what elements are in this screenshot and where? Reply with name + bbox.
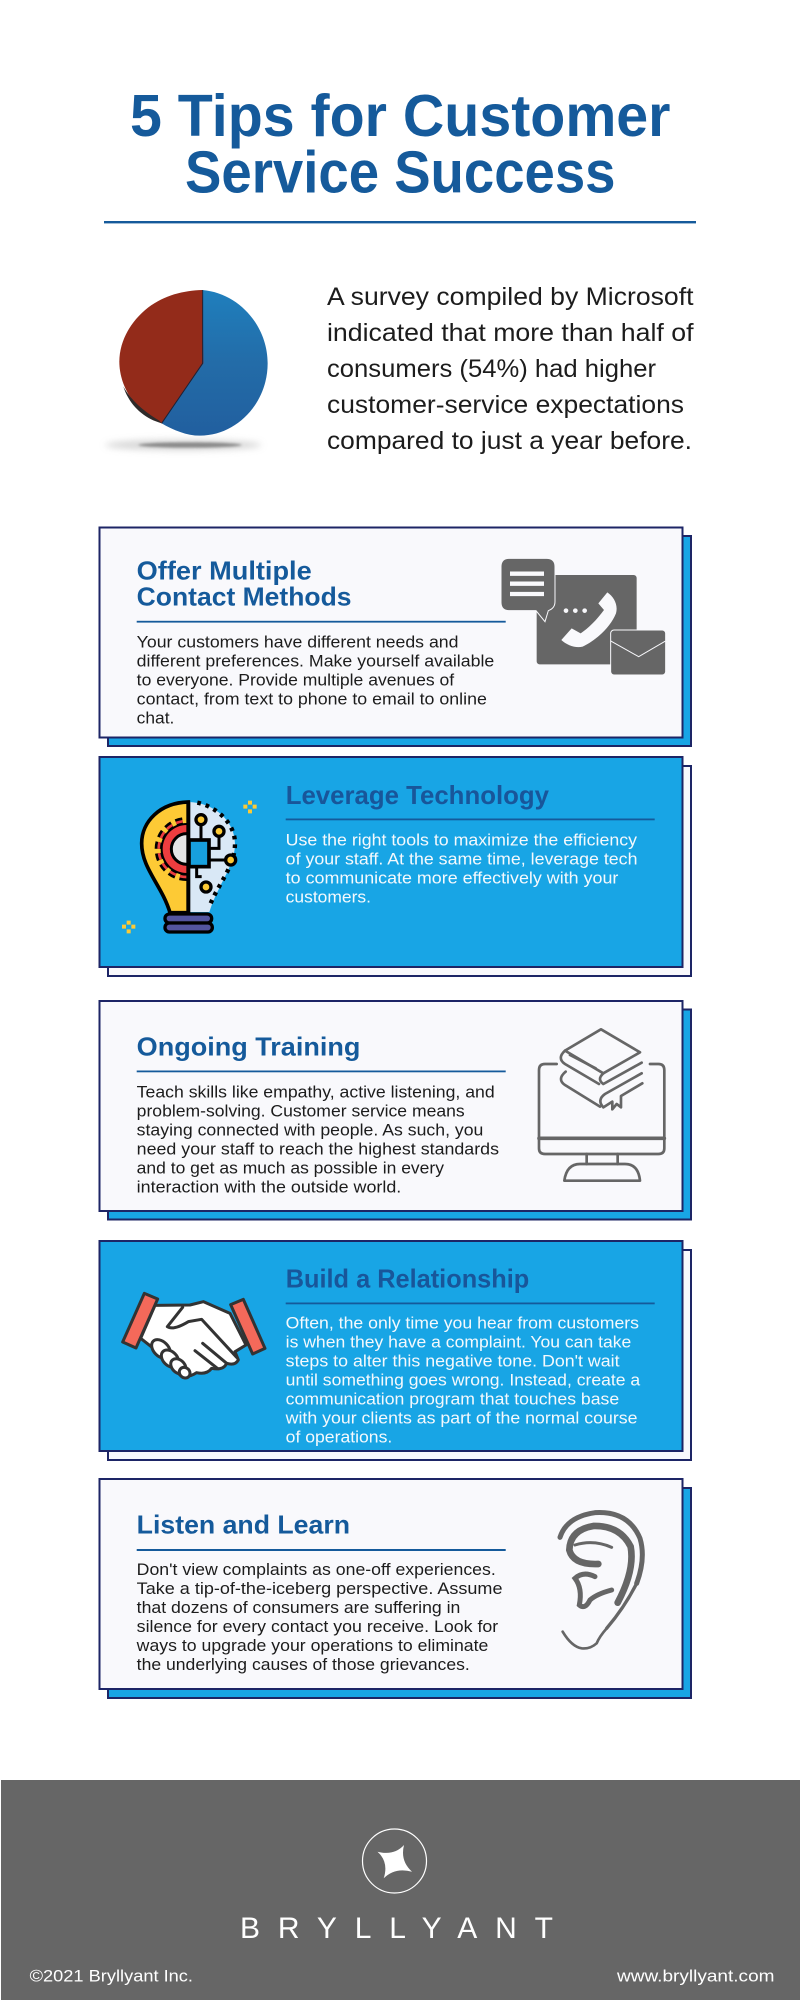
body text: is when they have a complaint. You can take [286,1332,631,1351]
body text: silence for every contact you receive. Look for [137,1617,499,1636]
website: www.bryllyant.com [616,1967,774,1986]
heading: Build a Relationship [286,1263,529,1293]
body text: staying connected with people. As such, you [137,1120,483,1139]
title: 5 Tips for Customer [130,83,671,149]
body text: steps to alter this negative tone. Don't wait [286,1351,620,1370]
pie chart icon: 54 percent [105,290,268,450]
body text: need your staff to reach the highest standards [137,1139,499,1158]
body text: of operations. [286,1427,392,1446]
panel: build a relationship [100,1241,691,1460]
panel: listen and learn [100,1479,691,1698]
icon: ear [560,1513,642,1648]
body text: and to get as much as possible in every [137,1158,445,1177]
body text: problem-solving. Customer service means [137,1101,465,1120]
heading: Contact Methods [137,582,352,612]
panel: offer multiple contact methods [100,528,691,746]
title: Service Success [185,140,616,206]
footer band [1,1780,800,2000]
body text [137,1082,499,1196]
body text: different preferences. Make yourself available [137,651,494,670]
panel: leverage technology [100,757,691,976]
heading: Offer Multiple [137,555,312,585]
brand name: BRYLLYANT [240,1912,553,1945]
body text: contact, from text to phone to email to online [137,689,487,708]
body text: communication program that touches base [286,1389,619,1408]
icon: light bulb with gear and circuit [122,801,257,933]
body text [285,1313,641,1446]
body text: ways to upgrade your operations to eliminate [136,1636,488,1655]
body text: Teach skills like empathy, active listening, and [137,1082,495,1101]
body text: to everyone. Provide multiple avenues of [137,670,455,689]
intro text: compared to just a year before. [327,427,692,455]
body text: Often, the only time you hear from customers [286,1313,639,1332]
title underline [104,221,696,223]
icon: phone, chat and email [501,558,666,675]
logo: star in circle [362,1829,426,1893]
heading [137,555,352,612]
body text: chat. [137,708,174,727]
panel: ongoing training [100,1001,691,1220]
body text: interaction with the outside world. [137,1177,401,1196]
copyright: ©2021 Bryllyant Inc. [30,1967,193,1986]
body text [286,830,638,906]
body text: of your staff. At the same time, leverage tech [286,849,638,868]
body text: that dozens of consumers are suffering in [137,1598,460,1617]
body text: Take a tip-of-the-iceberg perspective. Assume [137,1579,502,1598]
body text: Use the right tools to maximize the efficiency [286,830,638,849]
body text: to communicate more effectively with your [286,868,619,887]
body text: until something goes wrong. Instead, create a [286,1370,641,1389]
heading: Leverage Technology [286,780,550,810]
heading: Ongoing Training [137,1032,360,1062]
heading: Listen and Learn [137,1509,350,1539]
body text: with your clients as part of the normal course [285,1408,638,1427]
intro text: customer-service expectations [327,391,684,419]
intro text: consumers (54%) had higher [327,355,656,383]
body text: customers. [286,887,371,906]
icon: handshake [123,1293,265,1380]
body text: Your customers have different needs and [137,632,458,651]
title [130,83,671,206]
intro text: A survey compiled by Microsoft [327,283,694,311]
body text [137,632,494,727]
intro text: indicated that more than half of [327,319,694,347]
intro text [327,283,694,455]
body text: the underlying causes of those grievances. [137,1655,470,1674]
body text [136,1560,502,1674]
icon: books on a computer monitor [539,1029,664,1181]
body text: Don't view complaints as one-off experiences. [137,1560,496,1579]
